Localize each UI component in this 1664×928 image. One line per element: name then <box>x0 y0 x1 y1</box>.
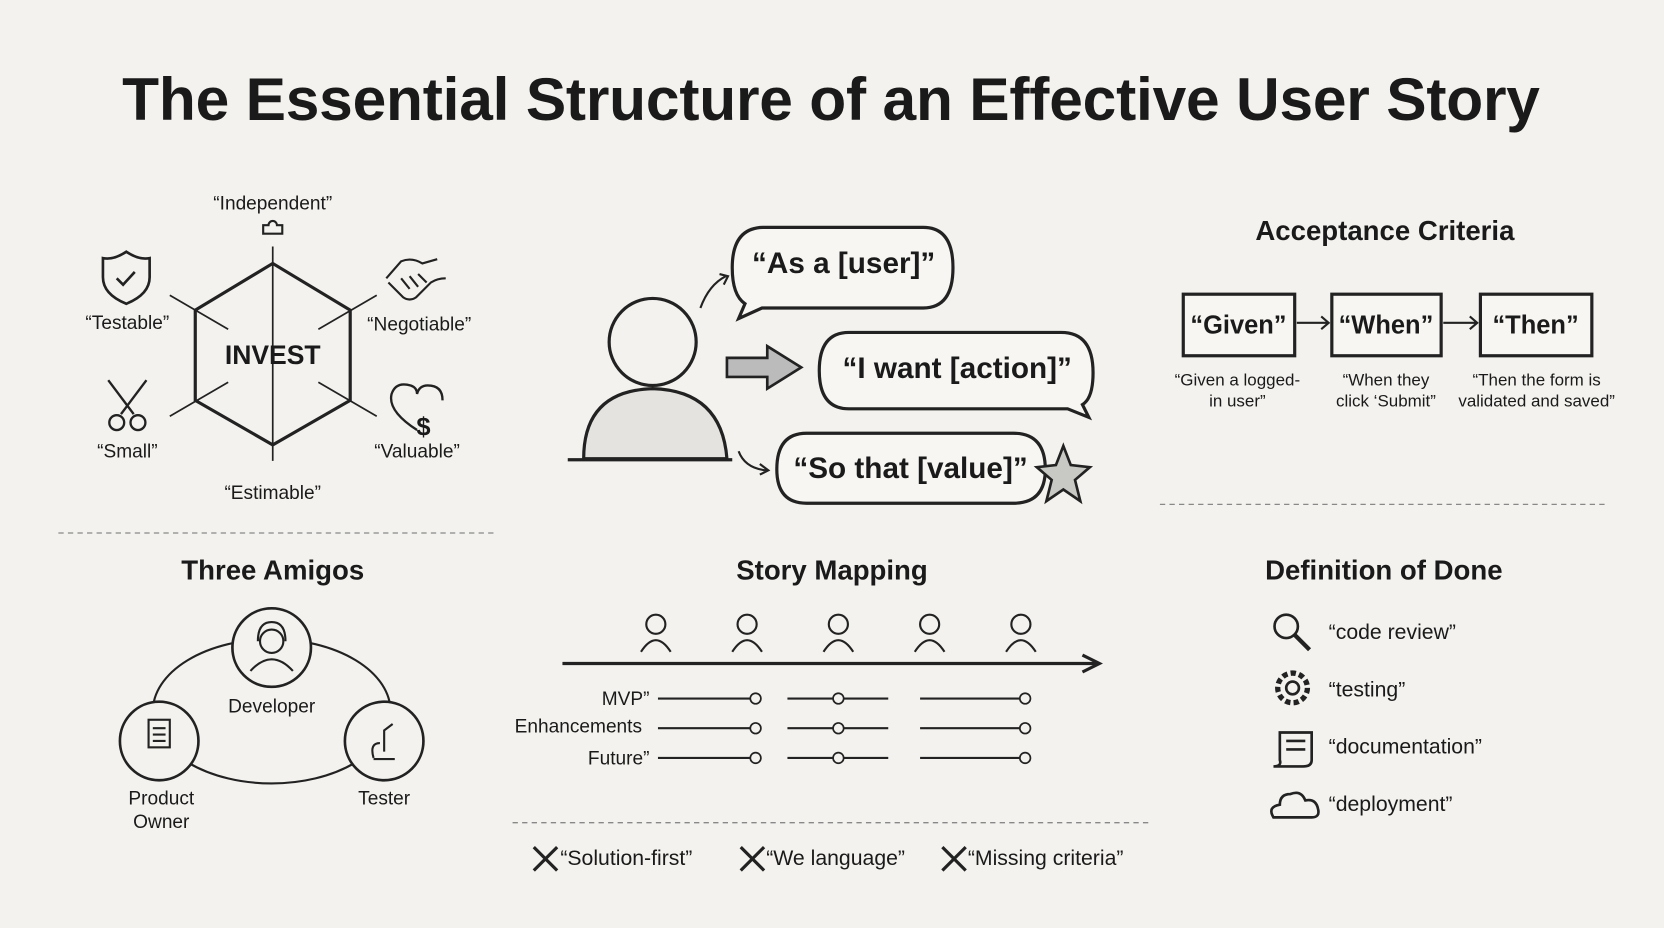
icon: star <box>1037 446 1090 501</box>
panel: definition of done <box>1265 555 1503 817</box>
panel: INVEST <box>85 193 471 504</box>
panel: acceptance criteria: “Given a logged- <box>1175 370 1300 389</box>
icon: shield <box>103 252 150 304</box>
icon: handshake <box>386 259 446 300</box>
panel: INVEST: “Valuable” <box>374 442 460 463</box>
icon: heart dollar <box>391 384 443 441</box>
arrows <box>700 274 768 475</box>
icon: puzzle <box>263 221 282 234</box>
panel: user story <box>568 227 1093 503</box>
panel: story mapping: MVP” <box>602 689 649 710</box>
bubble: I want: “I want [action]” <box>843 352 1072 385</box>
title: The Essential Structure of an Effective User Story <box>122 65 1540 133</box>
panel: definition of done: Definition of Done <box>1265 555 1503 586</box>
panel: three amigos: Product <box>128 789 195 810</box>
bubble: so that: “So that [value]” <box>793 452 1028 485</box>
panel: three amigos: Owner <box>133 812 190 833</box>
bubble: as a user: “As a [user]” <box>752 247 935 280</box>
panel: three amigos: Three Amigos <box>181 555 364 586</box>
panel: pitfalls: “Missing criteria” <box>968 847 1123 870</box>
panel: story mapping <box>515 555 1099 769</box>
panel: acceptance criteria: in user” <box>1209 392 1266 411</box>
panel: INVEST: “Small” <box>97 442 158 463</box>
panel: definition of done: “code review” <box>1329 621 1456 644</box>
panel: story mapping: Enhancements <box>515 716 642 737</box>
label: Independent: “Independent” <box>213 193 332 214</box>
panel: definition of done: “deployment” <box>1329 793 1452 816</box>
panel: definition of done: “documentation” <box>1329 736 1482 759</box>
bubble: I want <box>819 332 1093 417</box>
icon: heart dollar: $ <box>416 413 431 441</box>
bubble: so that <box>777 433 1045 503</box>
hexagon <box>170 246 377 461</box>
panel: acceptance criteria: “When” <box>1339 311 1433 339</box>
panel: acceptance criteria <box>1175 215 1615 411</box>
panel: INVEST: “Estimable” <box>224 483 321 504</box>
panel: story mapping: Future” <box>588 748 649 769</box>
panel: pitfalls: “We language” <box>766 847 905 870</box>
panel: INVEST: “Negotiable” <box>367 314 471 335</box>
panel: three amigos <box>120 555 423 833</box>
panel: acceptance criteria: Acceptance Criteria <box>1255 215 1515 246</box>
panel: pitfalls <box>534 847 1123 870</box>
panel: acceptance criteria: “When they <box>1343 370 1430 389</box>
panel: pitfalls: “Solution-first” <box>560 847 692 870</box>
icon: scissors <box>108 380 146 430</box>
icon: fat arrow <box>727 346 801 389</box>
panel: three amigos: Tester <box>358 789 411 810</box>
panel: acceptance criteria: “Given” <box>1190 311 1287 339</box>
panel: acceptance criteria: click ‘Submit” <box>1336 392 1436 411</box>
icon: person <box>568 298 732 460</box>
panel: three amigos: Developer <box>228 696 316 717</box>
panel: acceptance criteria: “Then” <box>1492 311 1579 339</box>
panel: definition of done: “testing” <box>1329 678 1405 701</box>
panel: story mapping: Story Mapping <box>736 555 928 586</box>
panel: INVEST: INVEST <box>225 340 321 370</box>
panel: acceptance criteria: validated and saved” <box>1458 392 1615 411</box>
bubble: as a user <box>732 227 953 319</box>
panel: acceptance criteria: “Then the form is <box>1473 370 1601 389</box>
panel: INVEST: “Testable” <box>85 313 169 334</box>
